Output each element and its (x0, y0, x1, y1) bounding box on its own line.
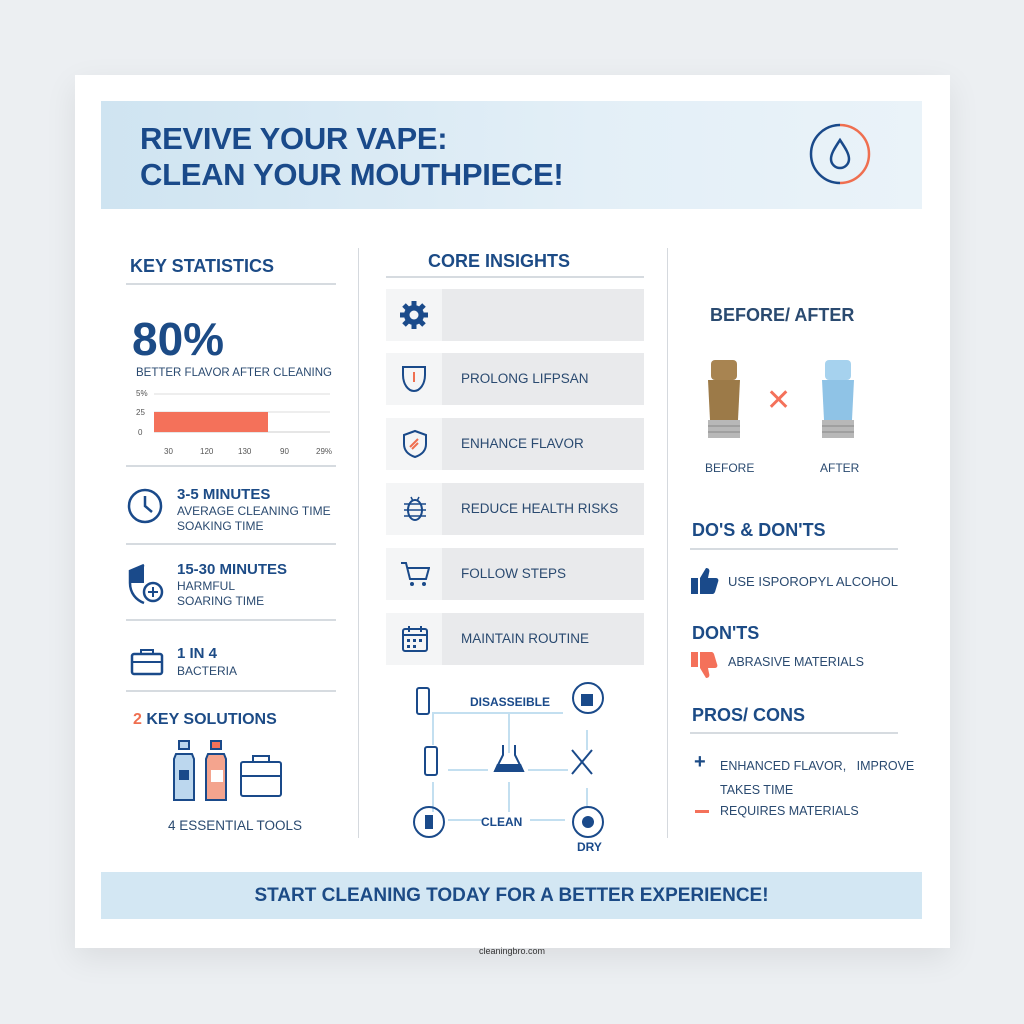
row: prolong lifespan: PROLONG LIFPSAN (461, 371, 589, 386)
flow diagram (413, 682, 604, 854)
panel: pros/cons: TAKES TIME (720, 783, 793, 797)
row: maintain routine: MAINTAIN ROUTINE (461, 631, 589, 646)
title: CLEAN YOUR MOUTHPIECE! (140, 157, 563, 192)
stat: 1 in 4: BACTERIA (177, 664, 237, 678)
panel: before/after: AFTER (820, 461, 859, 475)
panel: pros/cons: + (694, 751, 706, 773)
footer banner: START CLEANING TODAY FOR A BETTER EXPERIENCE! (254, 885, 769, 906)
row: gear (386, 289, 644, 341)
bar chart: 29% (316, 447, 332, 456)
footer banner (101, 872, 922, 919)
icons: tools (173, 740, 282, 801)
icon: water drop (810, 124, 870, 184)
row: enhance flavor (386, 418, 644, 470)
panel: before/after: BEFORE (705, 461, 754, 475)
panel: key statistics (126, 256, 336, 833)
row: prolong lifespan (386, 353, 644, 405)
stat: 1 in 4: 1 IN 4 (177, 645, 217, 662)
bar chart: 90 (280, 447, 289, 456)
icon: thumbs down (691, 652, 718, 678)
panel: core insights: CORE INSIGHTS (428, 251, 570, 271)
title (140, 121, 563, 192)
bar chart: 120 (200, 447, 214, 456)
row: follow steps: FOLLOW STEPS (461, 566, 566, 581)
icon: dirty mouthpiece (708, 360, 740, 438)
panel: pros/cons (690, 705, 914, 818)
row: maintain routine (386, 613, 644, 665)
stat: 3-5 minutes: AVERAGE CLEANING TIME (177, 504, 331, 518)
bar chart (136, 389, 332, 456)
bar chart: 25 (136, 408, 145, 417)
panel: do's & don'ts: USE ISPOROPYL ALCOHOL (728, 574, 898, 589)
source: cleaningbro.com (479, 946, 545, 956)
stat: 3-5 minutes: SOAKING TIME (177, 519, 263, 533)
panel: key statistics: 4 ESSENTIAL TOOLS (168, 818, 302, 833)
stat 80%: 80% (132, 313, 224, 365)
dividers (358, 248, 359, 838)
bar chart: 30 (164, 447, 173, 456)
flow diagram: DRY (577, 840, 602, 854)
stat: 1 in 4 (130, 645, 237, 678)
panel: before/after: BEFORE/ AFTER (710, 305, 854, 325)
panel: key statistics: BETTER FLAVOR AFTER CLEANING (136, 367, 332, 379)
row: follow steps (386, 548, 644, 600)
icon: clean mouthpiece (822, 360, 854, 438)
row: reduce health risks: REDUCE HEALTH RISKS (461, 501, 618, 516)
bar chart: 5% (136, 389, 148, 398)
title: REVIVE YOUR VAPE: (140, 121, 447, 156)
stat: 3-5 minutes: 3-5 MINUTES (177, 486, 270, 503)
panel: do's & don'ts: DO'S & DON'TS (692, 520, 826, 540)
row: enhance flavor: ENHANCE FLAVOR (461, 436, 584, 451)
header band (101, 101, 922, 209)
panel: before/after (705, 305, 859, 475)
row: reduce health risks (386, 483, 644, 535)
stat: 15-30 minutes: HARMFUL (177, 579, 235, 593)
heading: KEY STATISTICS (130, 256, 274, 276)
icon: thumbs up (691, 568, 718, 594)
key solutions: 2 KEY SOLUTIONS (133, 711, 277, 728)
panel: do's & don'ts (690, 520, 898, 678)
icon: x: ✕ (766, 384, 791, 417)
panel: pros/cons: REQUIRES MATERIALS (720, 804, 859, 818)
bar chart: 130 (238, 447, 252, 456)
panel: pros/cons: ENHANCED FLAVOR, IMPROVE (720, 759, 914, 773)
stat: 3-5 minutes (128, 486, 331, 533)
panel: do's & don'ts: DON'TS (692, 623, 759, 643)
flow diagram: DISASSEIBLE (470, 695, 550, 709)
stat: 15-30 minutes (128, 561, 287, 608)
card (75, 75, 950, 948)
flow diagram: CLEAN (481, 815, 522, 829)
bar chart: 0 (138, 428, 143, 437)
panel: do's & don'ts: ABRASIVE MATERIALS (728, 655, 864, 669)
panel: pros/cons: PROS/ CONS (692, 705, 805, 725)
stat: 15-30 minutes: SOARING TIME (177, 594, 264, 608)
stat: 15-30 minutes: 15-30 MINUTES (177, 561, 287, 578)
